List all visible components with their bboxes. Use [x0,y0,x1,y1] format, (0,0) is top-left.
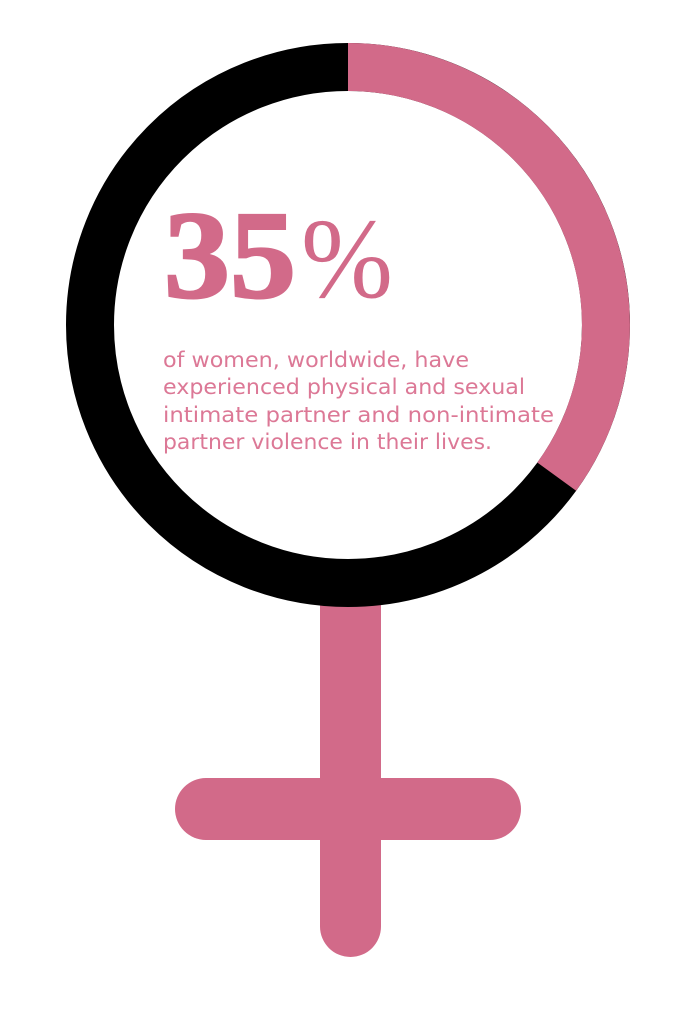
chart: donut ring showing 35 percent [90,67,606,583]
heading: 35 percent statistic [164,187,393,325]
text block: description: of women, worldwide, have [163,348,469,372]
heading: 35 percent statistic: 35 [164,187,296,325]
text block: description [163,348,554,454]
text block: description: experienced physical and sexual [163,375,525,399]
heading: 35 percent statistic: % [301,195,393,322]
icon: female symbol stem and crossbar [175,580,521,957]
text block: description: intimate partner and non-intimate [163,403,554,427]
text block: description: partner violence in their lives. [163,430,492,454]
